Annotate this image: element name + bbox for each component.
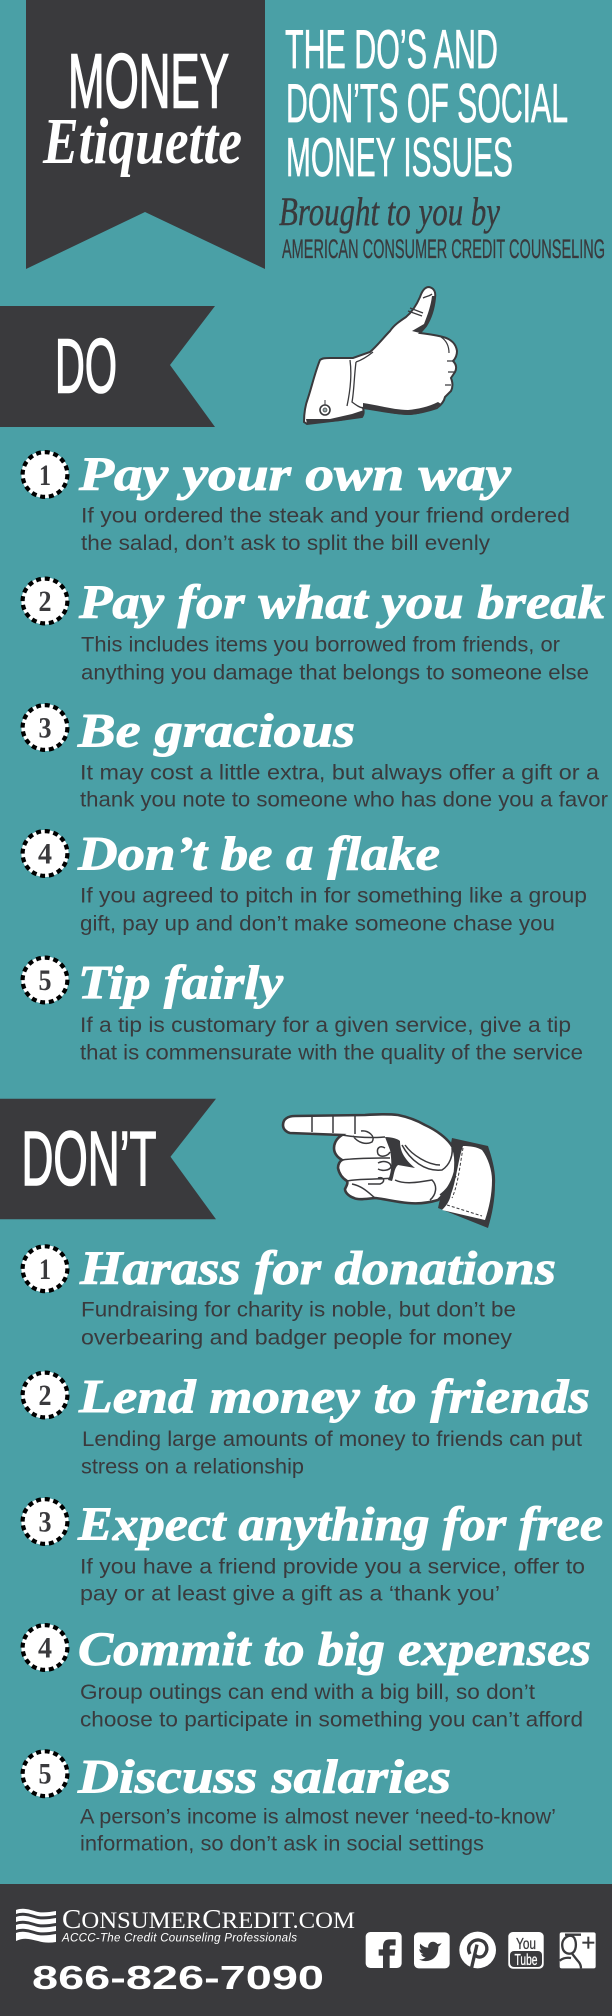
badge 3 (21, 1498, 69, 1545)
badge 2: 2 (38, 1379, 52, 1412)
DO item 1: Pay your own way (78, 448, 512, 501)
byline: Brought to you by (279, 189, 500, 234)
DO item 5: If a tip is customary for a given service, give a tip (80, 1014, 571, 1037)
DON'T item 2 (21, 1370, 590, 1478)
title ribbon: Money Etiquette: MONEY (68, 38, 229, 124)
DON'T ribbon: DON’T (22, 1116, 156, 1202)
footer bar (0, 1884, 612, 2016)
DON'T item 2: Lend money to friends (78, 1370, 590, 1423)
DON'T item 4: Commit to big expenses (78, 1623, 591, 1676)
DON'T item 4 (21, 1623, 591, 1732)
icon: youtube: You (516, 1936, 536, 1953)
title ribbon: Money Etiquette: Etiquette (42, 105, 242, 178)
DON'T item 1: Fundraising for charity is noble, but don’t be (81, 1299, 516, 1322)
DON'T item 5 (21, 1750, 556, 1856)
main heading (285, 18, 568, 188)
DO item 5 (21, 956, 583, 1065)
DO item 2: This includes items you borrowed from friends, or (81, 634, 560, 657)
DON'T item 2: Lending large amounts of money to friends can put (82, 1428, 582, 1451)
badge 1 (21, 451, 69, 498)
logo tagline: ACCC-The Credit Counseling Professionals (61, 1933, 297, 1945)
badge 5 (21, 956, 69, 1004)
DO item 4 (21, 827, 587, 936)
DON'T item 2: stress on a relationship (81, 1455, 304, 1478)
DO item 2: anything you damage that belongs to someone else (81, 661, 589, 684)
DON'T ribbon (0, 1099, 216, 1219)
badge 5: 5 (38, 964, 52, 997)
badge 1 (21, 1245, 69, 1292)
badge 1: 1 (39, 459, 51, 492)
DON'T item 4: choose to participate in something you can’t afford (80, 1709, 583, 1732)
DO item 1: the salad, don’t ask to split the bill evenly (81, 532, 491, 555)
icon: youtube (508, 1932, 544, 1969)
phone number: 866-826-7090 (32, 1959, 324, 1996)
DO ribbon: DO (55, 324, 117, 410)
badge 5: 5 (38, 1758, 52, 1791)
DO item 3: thank you note to someone who has done you a favor (80, 789, 608, 812)
icon: twitter (414, 1932, 450, 1968)
DO ribbon (0, 306, 215, 427)
DON'T item 1: overbearing and badger people for money (81, 1326, 513, 1349)
DO item 2 (21, 576, 605, 684)
DO item 3 (21, 704, 608, 812)
title ribbon: Money Etiquette (26, 0, 265, 269)
icon: google plus (560, 1932, 596, 1968)
DO item 5: Tip fairly (78, 956, 284, 1009)
DON'T item 3: If you have a friend provide you a service, offer to (80, 1555, 585, 1578)
DON'T item 3: pay or at least give a gift as a ‘thank you’ (80, 1583, 500, 1606)
DON'T item 3 (21, 1498, 603, 1606)
icon: thumbs up hand (304, 287, 457, 424)
DON'T item 5: Discuss salaries (77, 1750, 451, 1803)
DO item 4: If you agreed to pitch in for something like a group (80, 885, 587, 908)
icon: pointing hand (283, 1114, 495, 1228)
badge 2: 2 (38, 585, 52, 618)
DON'T item 5: A person’s income is almost never ‘need-to-know’ (80, 1805, 556, 1828)
icon: wave logo (16, 1909, 56, 1943)
badge 4 (21, 1624, 69, 1671)
badge 4: 4 (38, 838, 52, 870)
DO item 5: that is commensurate with the quality of the service (80, 1042, 583, 1065)
DO item 1 (21, 448, 570, 555)
badge 2 (21, 577, 69, 625)
DON'T item 3: Expect anything for free (77, 1498, 603, 1551)
DO item 2: Pay for what you break (78, 576, 605, 629)
badge 5 (21, 1750, 69, 1797)
DON'T item 4: Group outings can end with a big bill, so don’t (80, 1681, 535, 1704)
DON'T item 1: Harass for donations (79, 1242, 556, 1295)
badge 3: 3 (38, 1506, 52, 1538)
byline (279, 189, 605, 264)
icon: youtube: Tube (514, 1952, 538, 1969)
badge 3: 3 (38, 712, 52, 744)
DON'T item 5: information, so don’t ask in social settings (80, 1833, 484, 1856)
DO item 1: If you ordered the steak and your friend ordered (81, 504, 570, 527)
badge 3 (21, 704, 69, 751)
badge 4: 4 (38, 1632, 52, 1664)
icon: pinterest (459, 1932, 496, 1968)
DO item 3: It may cost a little extra, but always offer a gift or a (80, 761, 599, 784)
DO item 4: Don’t be a flake (77, 827, 440, 880)
logo wordmark: CONSUMER CREDIT.COM (62, 1904, 355, 1934)
DO item 4: gift, pay up and don’t make someone chase you (80, 913, 555, 936)
badge 4 (21, 830, 69, 877)
DO item 3: Be gracious (77, 705, 355, 758)
DON'T item 1 (21, 1242, 556, 1349)
icon: facebook (366, 1932, 402, 1968)
badge 1: 1 (39, 1253, 51, 1286)
badge 2 (21, 1371, 69, 1419)
